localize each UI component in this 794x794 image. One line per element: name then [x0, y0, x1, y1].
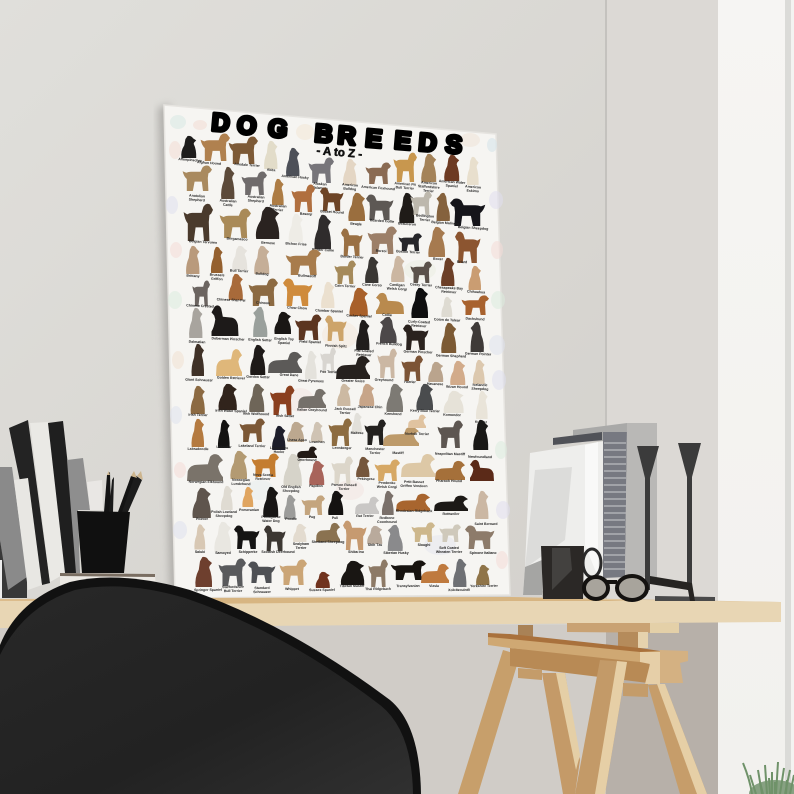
labels row 1: Bull Terrier	[395, 185, 415, 191]
labels row 10: Norwegian Elkhound	[189, 480, 223, 484]
labels row 9: Lakeland Terrier	[238, 444, 266, 448]
labels row 2: Australian	[247, 194, 265, 200]
right leg	[648, 684, 707, 794]
labels row 11: Rottweiler	[443, 512, 460, 516]
labels row 4: Cairn Terrier	[335, 283, 356, 289]
labels row 7	[185, 370, 489, 391]
striped book	[603, 432, 627, 578]
pastel paw and bone background	[166, 115, 510, 569]
labels row 6: Dalmatian	[189, 340, 205, 344]
labels row 9: Terrier	[369, 451, 381, 455]
labels row 11: Sheepdog	[216, 514, 232, 518]
labels row 4	[186, 269, 485, 295]
labels row 9: Labradoodle	[187, 447, 209, 451]
labels row 1: American Foxhound	[361, 185, 395, 191]
labels row 6: Flat-Coated	[354, 349, 374, 353]
labels row 5: Clumber Spaniel	[315, 308, 343, 314]
labels row 3: Boxer	[433, 257, 444, 261]
poster sheet	[164, 105, 510, 598]
labels row 10: Sheepdog	[282, 489, 299, 493]
underside of desk beam	[567, 623, 679, 633]
poster shadow	[158, 104, 180, 600]
candle holder left	[637, 446, 659, 590]
labels row 10: Nova Scotia	[253, 473, 273, 477]
labels row 11: Saint Bernard	[475, 522, 497, 526]
labels row 12: Terrier	[296, 546, 307, 550]
labels row 12: Shetland Sheepdog	[312, 540, 344, 544]
title: D	[210, 108, 231, 138]
lower beam	[510, 648, 650, 683]
labels row 13: Sussex Spaniel	[309, 588, 335, 592]
labels row 1: American Pit	[394, 181, 416, 187]
labels row 7: Havanese	[427, 382, 443, 386]
labels row 5: Cocker Spaniel	[346, 313, 372, 319]
labels row 9: Labrador	[216, 445, 232, 449]
glasses	[584, 576, 695, 601]
candle holder right	[678, 443, 701, 590]
labels row 9: Norfolk Terrier	[405, 432, 430, 436]
labels row 2: Beagle	[350, 222, 362, 226]
labels row 3: Border Collie	[312, 247, 334, 253]
end piece	[640, 652, 660, 684]
labels row 7: Giant Schnauzer	[185, 378, 214, 382]
labels row 6: French Bulldog	[376, 342, 402, 346]
labels row 12: Sealyham	[293, 542, 309, 546]
labels row 10: Lundehund	[231, 482, 251, 486]
labels row 13: Xoloitzcuintli	[448, 588, 470, 592]
labels row 3: Briard	[457, 260, 467, 264]
labels row 7: Golden Retriever	[217, 376, 246, 380]
labels row 10: Pharaoh Hound	[436, 479, 462, 483]
labels row 4: Bull Terrier	[230, 269, 249, 274]
labels row 1: Bulldog	[343, 187, 356, 191]
labels row 9	[187, 431, 492, 459]
labels row 6: Retriever	[356, 353, 372, 357]
dog row 13	[195, 557, 489, 588]
labels row 1: Staffordshire	[418, 184, 440, 190]
labels row 1: American	[421, 180, 437, 186]
labels row 2: Beauceron	[398, 221, 416, 227]
labels row 7: Harrier	[404, 380, 416, 384]
dog row 6	[189, 305, 484, 353]
labels row 7: Great Pyrenees	[298, 379, 324, 383]
labels row 13: Vizsla	[429, 584, 439, 588]
dog row 4	[186, 246, 481, 290]
labels row 8: Kuvasz	[475, 420, 487, 424]
labels row 6	[189, 336, 492, 359]
labels row 13: Springer Spaniel	[194, 588, 222, 592]
labels row 12: Shiba Inu	[348, 550, 364, 554]
mug	[541, 546, 601, 599]
labels row 8: Irish Terrier	[188, 413, 208, 417]
labels row 13	[194, 584, 498, 594]
labels row 5	[186, 297, 485, 329]
labels row 8: Italian Greyhound	[297, 408, 327, 412]
labels row 4: Griffon	[211, 277, 223, 281]
dog row 7	[192, 344, 485, 385]
labels row 11: Pug	[309, 515, 315, 519]
labels row 2: Anatolian	[189, 193, 205, 199]
labels row 3: Borzoi	[376, 249, 387, 253]
labels row 12: Scottish Deerhound	[261, 550, 295, 554]
dog row 10	[187, 446, 494, 486]
labels row 9: Lancashire	[270, 446, 288, 450]
plant	[743, 762, 794, 794]
labels row 1: Eskimo	[466, 189, 479, 193]
labels row 10: Papillon	[309, 484, 323, 488]
labels row 1: Malamute	[312, 185, 328, 191]
labels row 10: Griffon Vendeen	[400, 484, 428, 488]
labels row 8: Komondor	[443, 413, 462, 417]
labels row 10: Retriever	[255, 477, 271, 481]
labels row 6: Spaniel	[278, 341, 290, 345]
labels row 2: Basenji	[300, 212, 312, 216]
labels row 13: Bull Terrier	[224, 589, 243, 593]
labels row 10: Pekingese	[357, 477, 375, 481]
title: S	[444, 130, 463, 160]
labels row 1: American Husky	[281, 174, 309, 180]
far left leg	[458, 650, 520, 794]
dog row 12	[194, 521, 494, 552]
title: R	[336, 121, 357, 151]
labels row 1: Affenpinscher	[178, 157, 203, 163]
labels row 3: Bichon Frise	[285, 241, 307, 247]
labels row 7: Gordon Setter	[246, 375, 270, 379]
labels row 7: Fox Terrier	[320, 370, 339, 374]
small block left	[518, 625, 533, 637]
labels row 4: Chesapeake Bay	[435, 285, 463, 291]
labels row 11: Coonhound	[377, 520, 397, 524]
labels row 8: Kerry Blue Terrier	[410, 409, 440, 413]
labels row 13: Transylvanian	[396, 584, 420, 588]
labels row 1: Afghan Hound	[197, 160, 221, 166]
labels row 12: Soft Coated	[439, 546, 459, 550]
labels row 3: Boston Terrier	[396, 249, 421, 255]
labels row 8: Irish Water Spaniel	[215, 409, 247, 413]
small block lower	[623, 683, 648, 697]
mid back leg	[542, 673, 580, 794]
labels row 10: Norwegian	[232, 478, 250, 482]
labels row 11: Rhodesian Ridgeback	[396, 509, 432, 513]
labels row 10: Welsh Corgi	[377, 485, 397, 489]
dog row 9	[192, 413, 488, 450]
labels row 13: Schnauzer	[253, 590, 272, 594]
labels row 11: Pointer	[196, 517, 209, 521]
labels row 2: Terrier	[419, 218, 431, 222]
labels row 11: Water Dog	[262, 519, 280, 523]
white column	[718, 0, 794, 794]
labels row 5: Chinese Shar-Pei	[217, 297, 246, 303]
labels row 9: Newfoundland	[468, 455, 492, 459]
labels row 11: Polish Lowland	[211, 510, 237, 514]
title: E	[393, 126, 412, 156]
labels row 8	[188, 405, 487, 424]
labels row 2: Cattle	[223, 203, 233, 207]
book under cup	[60, 573, 156, 592]
labels row 9: Mastiff	[392, 451, 405, 455]
labels row 2: Bedlington	[416, 213, 434, 219]
labels row 12: Samoyed	[215, 551, 231, 555]
labels row 5: Chinese Crested	[186, 303, 214, 309]
labels row 10: Pembroke	[379, 481, 396, 485]
labels row 8: Jack Russell	[334, 407, 356, 411]
title	[210, 108, 463, 160]
labels row 1: American	[465, 184, 481, 190]
labels row 7: Great Dane	[280, 373, 298, 377]
labels row 1: Alaskan	[313, 182, 327, 187]
labels row 11: Portuguese	[261, 515, 281, 519]
labels row 5: Coton de Tulear	[434, 317, 461, 323]
labels row 13: Whippet	[285, 587, 300, 591]
labels row 1: American Water	[439, 179, 465, 185]
labels row 1: Terrier	[423, 189, 435, 193]
labels row 6: Finnish Spitz	[325, 344, 347, 348]
labels row 13: Tibetan Mastiff	[340, 584, 365, 588]
labels row 4: Chihuahua	[467, 290, 485, 294]
labels row 2: Australian	[219, 198, 237, 204]
title: D	[417, 128, 438, 158]
labels row 5: Retriever	[411, 324, 427, 328]
labels row 1: Spaniel	[445, 184, 458, 188]
labels row 2: Shepherd	[189, 197, 205, 203]
labels row 3	[189, 236, 467, 264]
poster: dog breeds A to Z	[164, 105, 510, 598]
labels row 3: Border Terrier	[340, 254, 364, 260]
labels row 10: Petit Basset	[404, 480, 424, 484]
labels row 6: English Setter	[248, 338, 273, 342]
labels row 9: Heeler	[274, 450, 285, 454]
labels row 11: Redbone	[380, 516, 395, 520]
labels row 6: Doberman Pinscher	[211, 336, 245, 342]
labels row 12: Spinone Italiano	[469, 551, 497, 555]
labels row 11: Pomeranian	[239, 508, 259, 512]
labels row 6: English Toy	[274, 337, 294, 341]
labels row 10: Otterhound	[297, 458, 317, 462]
labels row 13: Staffordshire	[222, 585, 244, 589]
labels row 9: Neapolitan Mastiff	[435, 452, 466, 456]
labels row 10: Terrier	[339, 487, 350, 491]
top beam	[488, 633, 660, 662]
labels row 12: Siberian Husky	[383, 551, 409, 555]
title: G	[267, 114, 289, 144]
labels row 7: Greyhound	[375, 378, 393, 382]
labels row 4: Cardigan	[389, 283, 405, 287]
labels row 2	[189, 193, 488, 231]
trestle legs	[458, 623, 707, 794]
labels row 7: Greater Swiss	[341, 379, 365, 383]
labels row 11: Rat Terrier	[356, 514, 374, 518]
labels row 9: Lowchen	[309, 440, 325, 444]
labels row 1: Airedale Terrier	[234, 162, 261, 168]
labels row 2: Belgian Sheepdog	[458, 225, 488, 231]
labels row 4: Brussels	[210, 273, 225, 277]
labels row 10: Old English	[281, 485, 301, 489]
labels row 6: German Pointer	[465, 351, 492, 357]
subtitle: - A to Z -	[316, 145, 363, 161]
labels row 8: Irish Wolfhound	[243, 412, 269, 416]
upper block	[618, 632, 648, 648]
candle base	[655, 596, 715, 601]
labels row 1	[178, 157, 481, 194]
magazines on right	[523, 423, 627, 595]
grey fabric book	[625, 423, 657, 577]
dog row 5	[192, 274, 489, 318]
labels row 4: Cesky Terrier	[410, 282, 433, 288]
labels row 3: Bergamasco	[226, 236, 248, 242]
labels row 6: Field Spaniel	[299, 340, 321, 344]
labels row 4: Retriever	[441, 290, 457, 294]
labels row 9: Maltese	[351, 431, 364, 435]
labels row 6: German Shepherd	[436, 353, 466, 359]
labels row 11: Poodle	[285, 517, 297, 521]
labels row 6: German Pinscher	[403, 349, 433, 355]
labels row 2: Basset Hound	[320, 209, 344, 215]
books on left	[0, 420, 103, 598]
labels row 2: Shepherd	[248, 198, 264, 204]
centre leg	[575, 660, 627, 794]
labels row 4: Bulldog	[255, 272, 269, 276]
labels row 10: Parson Russell	[331, 483, 357, 487]
labels row 13: Yorkshire Terrier	[470, 584, 498, 588]
labels row 1: American	[342, 182, 358, 188]
labels row 2: Bearded Collie	[370, 218, 394, 224]
labels row 5: Chow Chow	[287, 306, 307, 310]
dog row 3	[184, 204, 480, 263]
labels row 9: Manchester	[365, 447, 385, 451]
dog row 11	[192, 486, 488, 519]
labels row 8: Keeshond	[385, 412, 402, 416]
labels row 1: Akita	[267, 168, 276, 172]
labels row 10	[189, 458, 462, 493]
labels row 3: Belgian Tervuren	[189, 239, 217, 245]
pencil cup	[77, 471, 143, 573]
labels row 2: Terrier	[272, 208, 284, 212]
chair	[0, 578, 421, 794]
dog row 1	[181, 134, 479, 185]
labels row 9: Lhasa Apso	[287, 438, 307, 442]
labels row 4: Bullmastiff	[298, 274, 317, 279]
labels row 8: Irish Setter	[276, 414, 295, 418]
labels row 2: Australian	[269, 203, 287, 209]
labels row 5: Chinook	[256, 301, 270, 305]
labels row 4: Welsh Corgi	[387, 286, 407, 292]
title: O	[236, 111, 258, 141]
labels row 12: Schipperke	[239, 550, 257, 554]
labels row 13: Thai Ridgeback	[365, 587, 391, 591]
labels row 7: Icelandic	[472, 383, 488, 387]
labels row 4: Cane Corso	[362, 282, 382, 288]
title: E	[364, 124, 383, 154]
labels row 12: Wheaten Terrier	[436, 550, 463, 554]
labels row 13: Standard	[254, 586, 270, 590]
labels row 5: Curly-Coated	[408, 319, 430, 325]
desk	[0, 597, 781, 628]
labels row 3: Bernese	[261, 241, 275, 245]
title: B	[313, 119, 334, 149]
labels row 5: Dachshund	[465, 317, 485, 321]
labels row 8: Terrier	[339, 411, 351, 415]
labels row 12	[195, 540, 497, 555]
labels row 11	[196, 508, 497, 526]
labels row 4: Brittany	[186, 274, 200, 278]
dog row 2	[183, 166, 485, 226]
dog row 8	[191, 384, 488, 419]
labels row 5: Collie	[382, 313, 392, 317]
labels row 12: Saluki	[195, 550, 205, 554]
labels row 7: Ibizan Hound	[446, 385, 468, 389]
labels row 8: Japanese Chin	[358, 405, 382, 409]
labels row 2: Belgian Malinois	[431, 220, 459, 226]
labels row 7: Sheepdog	[471, 387, 488, 391]
labels row 11: Puli	[332, 516, 338, 520]
labels row 9: Leonberger	[332, 446, 352, 450]
labels row 12: Shih Tzu	[368, 543, 382, 547]
labels row 12: Sloughi	[418, 543, 430, 547]
